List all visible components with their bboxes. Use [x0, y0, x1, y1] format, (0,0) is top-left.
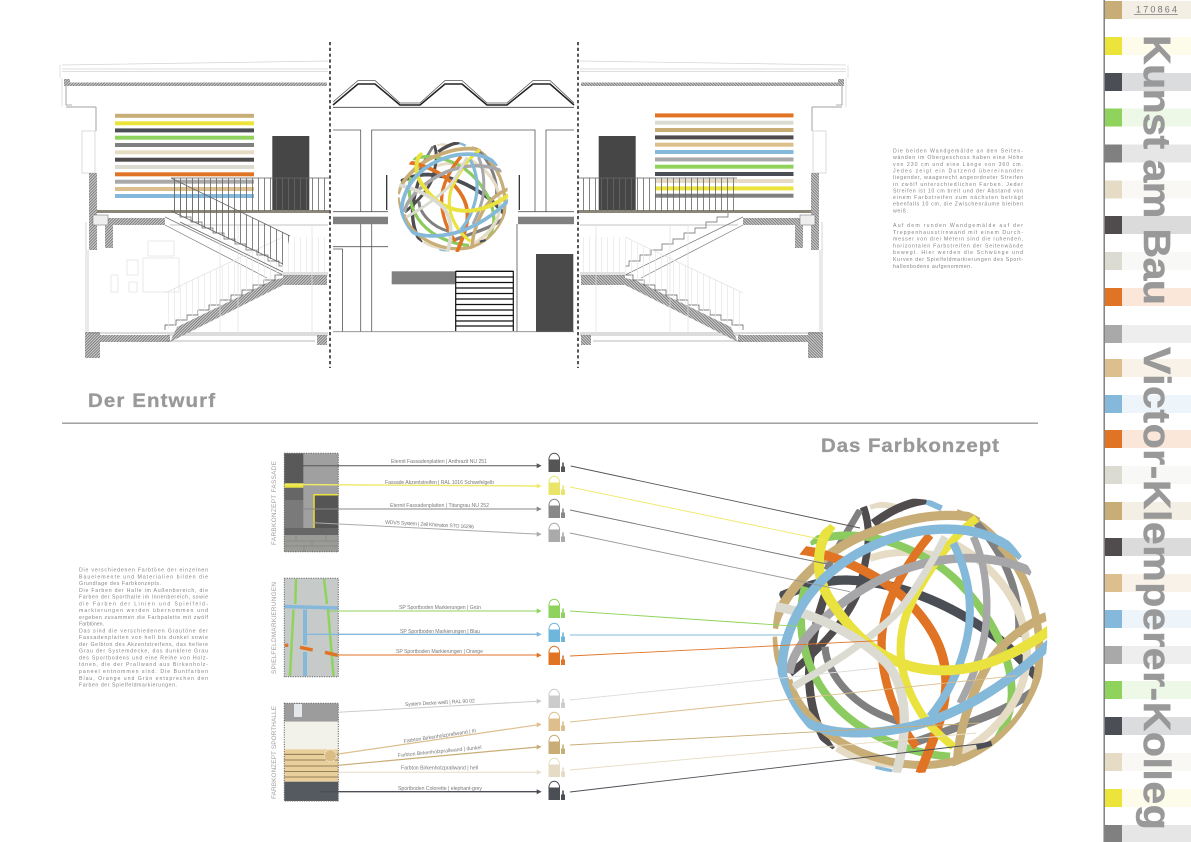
text block: colour concept: die Farben der Linien und Spielfeld- [79, 601, 208, 607]
text block: wall murals: wänden im Obergeschoss haben eine Höhe [893, 155, 1023, 161]
text block: colour concept: tönen, die der Prallwand aus Birkenholz- [79, 662, 208, 668]
paint cans [548, 453, 565, 800]
vertical label: Fassade: FARBKONZEPT FASSADE [271, 461, 278, 545]
mural stripes: right wall [655, 113, 794, 198]
text block: colour concept: Das sind die verschiedenen Grautöne der [79, 628, 208, 634]
arrow labels [385, 459, 494, 792]
grey landing block [392, 271, 455, 284]
text block: wall murals [893, 148, 1024, 270]
leader lines: cans to sphere [570, 466, 1017, 792]
text block: wall murals: in zwölf unterschiedlichen Farben. Jeder [893, 182, 1023, 188]
section: left wall elevation [60, 61, 330, 358]
swatch: court markings [284, 578, 338, 677]
text block: wall murals: Treppenhausstirnwand mit einem Durch- [893, 230, 1023, 236]
text block: colour concept: der Gelbton des Akzentstreifens, das hellere [79, 642, 208, 648]
black stair [456, 271, 513, 326]
arrow labels: SP Sportboden Markierungen | Grün [399, 605, 481, 611]
text block: wall murals: horizontalen Farbstreifen der Seitenwände [893, 243, 1023, 249]
arrow labels: Farbton Birkenholzprallwand | dunkel [398, 745, 482, 759]
arrow labels: Fassade Akzentstreifen | RAL 1016 Schwefelgelb [385, 480, 494, 486]
text block: wall murals: Jedes zeigt ein Dutzend übereinander [893, 168, 1023, 174]
text block: colour concept: Die Farben der Halle im Außenbereich, die [79, 588, 208, 594]
arrow labels: SP Sportboden Markierungen | Orange [396, 649, 483, 655]
heading: Das Farbkonzept: Das Farbkonzept [821, 435, 999, 457]
dashed section line: left [329, 42, 331, 368]
arrow labels: Farbton Birkenholzprallwand | hell [401, 766, 478, 772]
vertical project title [1135, 35, 1178, 830]
text block: colour concept: ergeben zusammen die Farbpalette mit zwölf [79, 615, 209, 621]
text block: wall murals: weiß. [893, 208, 908, 214]
arrow labels: System Decke weiß | RAL 90 02 [405, 698, 475, 708]
text block: colour concept: Farbtönen. [79, 622, 104, 628]
text block: wall murals: Kurven der Spielfeldmarkierungen des Sport- [893, 257, 1023, 263]
arrow labels: WDVS System | Zeil Kheraton STO 16296 [385, 520, 474, 530]
text block: wall murals: liegender, waagerecht angeordneter Streifen [893, 175, 1023, 181]
text block: colour concept: Bauelemente und Materialien bilden die [79, 574, 208, 580]
arrow labels: Eternit Fassadenplatten | Anthrazit NU 251 [391, 459, 487, 465]
text block: colour concept: Blau, Orange und Grün entsprechen den [79, 676, 208, 682]
roof zigzag [333, 80, 574, 107]
vertical label: Spielfeldmarkierungen: SPIELFELDMARKIERUNGEN [271, 582, 278, 674]
text block: colour concept: Grundlage des Farbkonzepts. [79, 581, 161, 587]
palette swatches [1105, 1, 1191, 842]
mural stripes: left wall [115, 114, 254, 198]
structure lines [333, 130, 574, 332]
arrow labels: SP Sportboden Markierungen | Blau [400, 629, 480, 635]
text block: wall murals: bewegt. Hier werden die Schwünge und [893, 250, 1023, 256]
text block: colour concept: Farben der Sporthalle im Innenbereich, sowie [79, 595, 208, 601]
text block: colour concept: Grau der Systemdecke, das dunklere Grau [79, 649, 208, 655]
text block: wall murals: einem Farbstreifen zum nächsten beträgt [893, 195, 1024, 201]
vertical label: Sporthalle: FARBKONZEPT SPORTHALLE [271, 706, 278, 799]
text block: colour concept: Fassadenplatten von hell bis dunkel sowie [79, 635, 208, 641]
text block: colour concept: markierungen werden übernommen und [79, 608, 208, 614]
text block: wall murals: ebenfalls 10 cm, die Zwischenräume bleiben [893, 202, 1023, 208]
project number: 170864 [1136, 4, 1177, 14]
section: right wall elevation [578, 61, 848, 358]
arrow labels: Eternit Fassadenplatten | Titangrau NU 252 [390, 503, 489, 509]
arrow labels: Farbton Birkenholzprallwand | III [403, 728, 476, 745]
text block: wall murals: von 230 cm und eine Länge von 360 cm. [893, 162, 1023, 168]
text block: wall murals: hallenbodens aufgenommen. [893, 264, 972, 270]
text block: colour concept: paneel entnommen sind. Die Buntfarben [79, 669, 208, 675]
vertical project title: Victor-Klemperer-Kolleg [1135, 347, 1178, 830]
divider rule [62, 422, 1038, 424]
vertical project title: Kunst am Bau [1135, 35, 1178, 305]
swatch: facade [284, 453, 338, 552]
colour strip sidebar [1104, 0, 1191, 842]
heading: Der Entwurf: Der Entwurf [88, 390, 215, 412]
text block: colour concept: des Sportbodens und eine Reihe von Holz- [79, 656, 208, 662]
section: central stairwell elevation [333, 80, 574, 332]
text block: wall murals: Die beiden Wandgemälde an den Seiten- [893, 148, 1023, 154]
text block: colour concept: Die verschiedenen Farbtöne der einzelnen [79, 568, 208, 574]
arrow labels: Sportboden Colorette | elephant-grey [398, 786, 482, 792]
swatch: sports hall [284, 703, 338, 801]
text block: wall murals: messer von drei Metern sind die ruhenden, [893, 237, 1023, 243]
sphere mural: small [398, 142, 509, 253]
sphere mural: large [773, 500, 1050, 777]
door [536, 254, 573, 332]
dashed section line: right [577, 42, 579, 368]
text block: colour concept [79, 568, 209, 688]
arrows: swatches to paint cans [285, 466, 538, 792]
text block: colour concept: Farben der Spielfeldmarkierungen. [79, 682, 177, 688]
arrowheads [537, 463, 542, 794]
text block: wall murals: Streifen ist 10 cm breit und der Abstand von [893, 188, 1023, 194]
text block: wall murals: Auf dem runden Wandgemälde auf der [893, 223, 1023, 229]
